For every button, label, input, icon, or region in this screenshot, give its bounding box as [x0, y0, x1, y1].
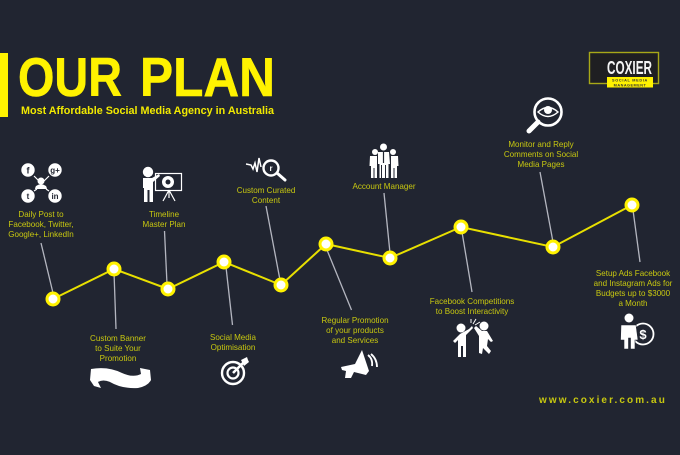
title: PLAN [140, 47, 275, 108]
logo: Coxier: COXIER [607, 57, 652, 78]
icon: high five [453, 319, 493, 357]
text: monitor and reply: Media Pages [518, 160, 564, 169]
title [18, 47, 275, 108]
text: custom banner: to Suite Your [95, 344, 141, 353]
text: custom curated content: Custom Curated [237, 186, 295, 195]
icon: businessman with dollar [620, 314, 654, 349]
logo: Coxier: MANAGEMENT [614, 84, 646, 88]
icon: businessman with dollar: $ [639, 327, 647, 342]
icon: eye magnifier [529, 98, 562, 131]
text: timeline master plan: Timeline [149, 210, 180, 219]
icon: presenter [143, 167, 182, 202]
logo: Coxier [590, 52, 658, 88]
text: setup ads: and Instagram Ads for [594, 279, 673, 288]
website url: www.coxier.com.au [538, 395, 667, 406]
text: daily post: Google+, LinkedIn [8, 230, 74, 239]
icon: social network: t [27, 192, 30, 201]
icon: banner ribbon [90, 368, 151, 388]
text: setup ads: a Month [618, 299, 648, 308]
icon: social network: f [26, 166, 30, 176]
icon: megaphone [341, 350, 377, 378]
accent bar [0, 53, 8, 117]
icon: social network [21, 163, 62, 203]
text: custom banner: Promotion [100, 354, 136, 363]
text: social media optimisation: Social Media [210, 333, 257, 342]
text: facebook competitions: Facebook Competitions [430, 297, 514, 306]
text: setup ads: Setup Ads Facebook [596, 269, 671, 278]
icon: social network: g+ [50, 166, 60, 175]
icon: curated content magnifier [246, 158, 285, 180]
text: custom curated content: Content [252, 196, 281, 205]
text: monitor and reply: Comments on Social [504, 150, 578, 159]
text: regular promotion: of your products [326, 326, 384, 335]
title: OUR [18, 47, 122, 108]
icon: social network: in [51, 192, 59, 201]
subtitle: Most Affordable Social Media Agency in Australia [21, 105, 274, 117]
icon: target [222, 357, 249, 384]
text: setup ads: Budgets up to $3000 [596, 289, 671, 298]
text: account manager: Account Manager [352, 182, 416, 191]
icon: curated content magnifier: r [269, 164, 273, 173]
connector lines [41, 172, 640, 329]
text: facebook competitions: to Boost Interactivity [436, 307, 508, 316]
text: regular promotion: and Services [332, 336, 378, 345]
text: custom banner: Custom Banner [90, 334, 146, 343]
text: daily post: Daily Post to [18, 210, 64, 219]
text: timeline master plan: Master Plan [143, 220, 185, 229]
text: daily post: Facebook, Twitter, [8, 220, 74, 229]
timeline line [53, 205, 632, 299]
icon: team [370, 144, 398, 178]
text: social media optimisation: Optimisation [211, 343, 255, 352]
text: monitor and reply: Monitor and Reply [508, 140, 574, 149]
timeline nodes [47, 199, 638, 305]
logo: Coxier: SOCIAL MEDIA [612, 78, 648, 82]
text: regular promotion: Regular Promotion [321, 316, 389, 325]
